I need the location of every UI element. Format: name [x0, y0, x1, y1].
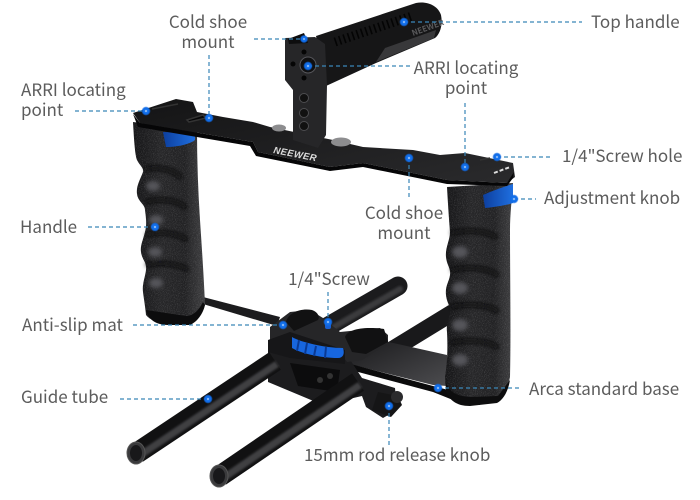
blue center knob: [292, 337, 344, 358]
bottom left arm: [203, 297, 280, 326]
rear guide rods: [325, 286, 452, 354]
label: cold shoe mount top: mount: [181, 28, 235, 53]
label: ARRI locating point centre: point: [445, 74, 488, 99]
label: rod release knob: 15mm rod release knob: [304, 441, 490, 466]
label: handle: Handle: [20, 213, 77, 238]
handle mount plate: [285, 33, 327, 148]
blue adjustment knob left: [163, 132, 195, 147]
base plate right: [345, 340, 480, 405]
marker dots: [142, 18, 518, 410]
label: anti-slip mat: Anti-slip mat: [22, 311, 124, 336]
handle logo: NEEWER: [410, 17, 446, 39]
NEEWER logo plate: NEEWER: [272, 145, 318, 164]
mount screws: [272, 124, 351, 146]
label: ARRI locating point left: point: [21, 96, 64, 121]
label: screw hole: 1/4"Screw hole: [562, 142, 682, 167]
label: screw: 1/4"Screw: [288, 265, 370, 290]
guide rods front: [127, 361, 360, 487]
rod clamp body: [268, 345, 397, 418]
label: cold shoe mount lower: Cold shoe: [365, 199, 443, 224]
label: cold shoe mount top: Cold shoe: [169, 8, 247, 33]
label: ARRI locating point left: ARRI locating: [21, 76, 126, 101]
clamp plate: [268, 310, 388, 364]
label: guide tube: Guide tube: [21, 383, 108, 408]
label: arca standard base: Arca standard base: [529, 375, 679, 400]
top handle grip: [316, 3, 446, 86]
label: top handle: Top handle: [591, 8, 680, 33]
label: adjustment knob: Adjustment knob: [544, 184, 680, 209]
left handle: [133, 122, 205, 325]
leader lines: [75, 22, 582, 447]
rod release knob: [372, 391, 403, 417]
label: ARRI locating point centre: ARRI locating: [414, 54, 518, 79]
blue adjustment knob right: [483, 184, 513, 208]
right handle: [445, 183, 513, 406]
top bar: [133, 99, 515, 186]
label: cold shoe mount lower: mount: [377, 219, 431, 244]
